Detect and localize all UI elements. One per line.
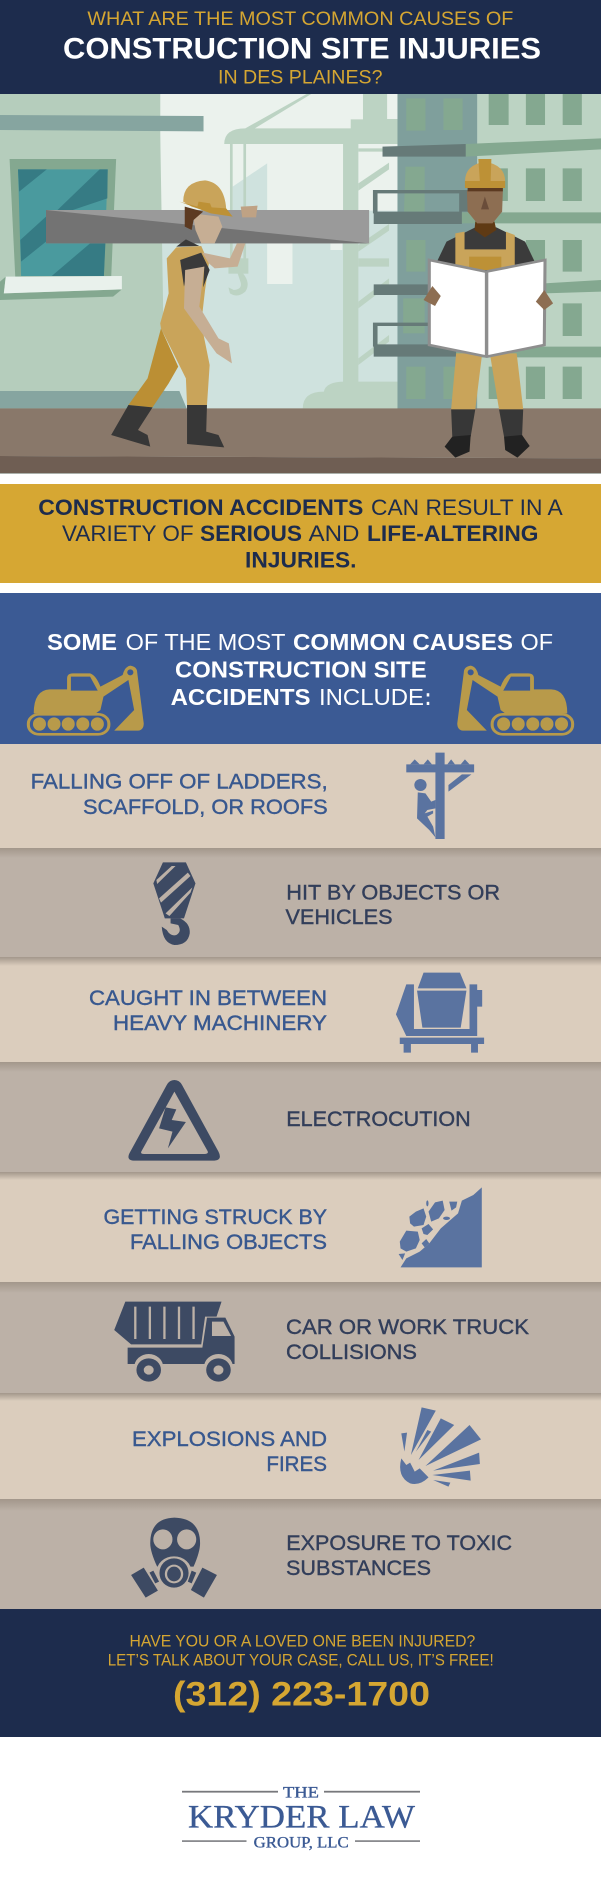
cause row 2: hit by objects [0, 848, 601, 957]
crane [224, 94, 399, 408]
blue section heading: COMMON CAUSES [293, 629, 513, 655]
icon: rockslide [399, 1187, 482, 1267]
icon: excavator left [28, 666, 144, 734]
cause row 7: explosions: EXPLOSIONS AND [132, 1428, 327, 1451]
title header [0, 0, 601, 94]
gold statement banner: AND [308, 521, 360, 546]
icon: cement mixer [396, 973, 484, 1053]
icon: gas mask [131, 1518, 217, 1598]
gold statement banner: CAN RESULT IN A [371, 495, 563, 520]
footer call to action: LET’S TALK ABOUT YOUR CASE, CALL US, IT’S FREE! [108, 1652, 494, 1670]
logo: The Kryder Law Group: GROUP, LLC [254, 1834, 349, 1851]
icon: worker climbing utility pole [406, 753, 474, 839]
cause row 3: caught in machinery [0, 957, 601, 1062]
title header: WHAT ARE THE MOST COMMON CAUSES OF [87, 8, 513, 30]
illustration: construction site with two workers [0, 94, 601, 474]
cause row 7: explosions [0, 1393, 601, 1499]
gold statement banner: VARIETY OF [62, 521, 194, 546]
cause row 8: toxic substances: SUBSTANCES [286, 1557, 431, 1580]
right building [373, 94, 601, 409]
cause row 4: electrocution: ELECTROCUTION [286, 1108, 471, 1131]
cause row 2: hit by objects: HIT BY OBJECTS OR [286, 881, 500, 904]
gold statement banner: CONSTRUCTION ACCIDENTS [38, 495, 363, 520]
icon: excavator right [457, 666, 573, 734]
cause row 5: falling objects: GETTING STRUCK BY [104, 1206, 327, 1229]
cause row 3: caught in machinery: HEAVY MACHINERY [113, 1012, 327, 1035]
blue section heading: SOME [47, 629, 117, 655]
cause row 8: toxic substances: EXPOSURE TO TOXIC [286, 1532, 512, 1555]
icon: explosion [400, 1407, 481, 1487]
steel beam [46, 210, 369, 243]
cause row 1: falling [0, 744, 601, 848]
cause row 5: falling objects [0, 1172, 601, 1282]
blue section heading: OF THE MOST [126, 629, 286, 655]
gold statement banner: SERIOUS [200, 521, 302, 546]
icon: dump truck [114, 1302, 235, 1382]
cause row 6: truck collisions: COLLISIONS [286, 1341, 417, 1364]
cause row 6: truck collisions: CAR OR WORK TRUCK [286, 1316, 529, 1339]
cause row 3: caught in machinery: CAUGHT IN BETWEEN [89, 987, 327, 1010]
gold statement banner [0, 484, 601, 583]
icon: high voltage triangle [128, 1080, 220, 1161]
worker reading plans [424, 159, 553, 458]
cause row 8: toxic substances [0, 1499, 601, 1609]
cause row 2: hit by objects: VEHICLES [286, 906, 392, 929]
cause row 1: falling: FALLING OFF OF LADDERS, [31, 770, 328, 793]
title header: CONSTRUCTION SITE INJURIES [63, 32, 541, 65]
left building [0, 94, 204, 408]
blue section heading: OF [520, 629, 553, 655]
blue section heading: INCLUDE [319, 684, 424, 710]
cause row 4: electrocution [0, 1062, 601, 1172]
footer call to action: HAVE YOU OR A LOVED ONE BEEN INJURED? [130, 1633, 475, 1651]
cause row 1: falling: SCAFFOLD, OR ROOFS [83, 796, 328, 819]
gold statement banner: LIFE-ALTERING [367, 521, 538, 546]
cause row 5: falling objects: FALLING OBJECTS [130, 1231, 327, 1254]
logo: The Kryder Law Group [182, 1785, 420, 1851]
logo: The Kryder Law Group: KRYDER LAW [188, 1799, 416, 1835]
gold statement banner: INJURIES. [245, 548, 356, 573]
footer call to action [0, 1609, 601, 1737]
blue section heading: : [425, 684, 431, 710]
blue section heading: ACCIDENTS [171, 684, 310, 710]
cause row 7: explosions: FIRES [266, 1453, 327, 1476]
logo: The Kryder Law Group: THE [283, 1785, 319, 1802]
cause row 6: truck collisions [0, 1282, 601, 1393]
worker carrying beam [111, 180, 258, 447]
ground [0, 408, 601, 473]
footer call to action: (312) 223-1700 [173, 1676, 430, 1714]
blue section heading: CONSTRUCTION SITE [175, 657, 427, 683]
title header: IN DES PLAINES? [218, 66, 383, 88]
icon: crane hook [153, 862, 195, 945]
blue section heading [0, 593, 601, 744]
